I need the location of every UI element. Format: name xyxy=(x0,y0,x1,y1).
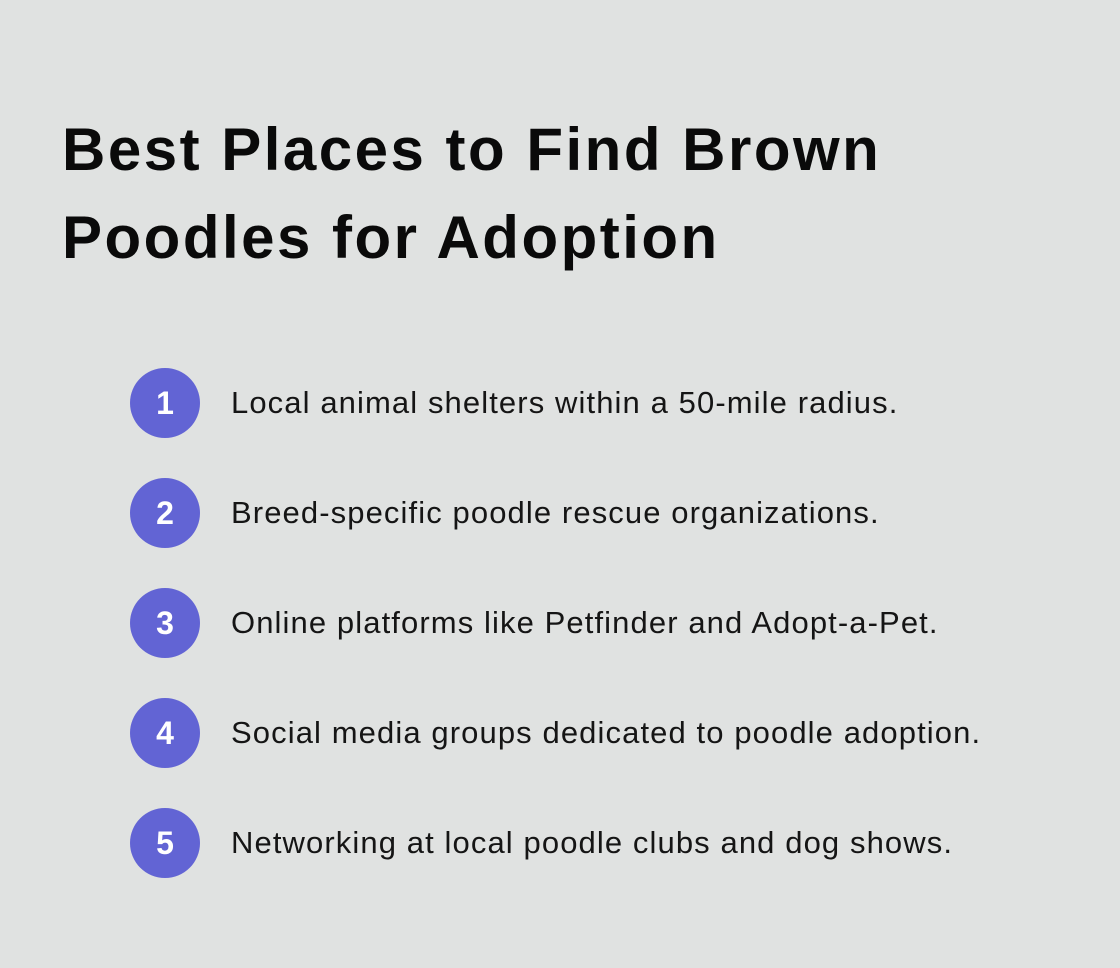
list item 3 xyxy=(130,588,939,658)
text 1: Local animal shelters within a 50-mile radius. xyxy=(231,385,898,420)
list item 2 xyxy=(130,478,880,548)
list item 4 xyxy=(130,698,981,768)
text 4: Social media groups dedicated to poodle adoption. xyxy=(231,715,981,750)
text 2: Breed-specific poodle rescue organizations. xyxy=(231,495,880,530)
title xyxy=(62,116,881,271)
icon: number 1 circle xyxy=(130,368,200,438)
icon: number 2 circle xyxy=(130,478,200,548)
icon: number 5 circle xyxy=(130,808,200,878)
icon: number 3 circle xyxy=(130,588,200,658)
title: Poodles for Adoption xyxy=(62,204,720,271)
list item 1 xyxy=(130,368,898,438)
text 3: Online platforms like Petfinder and Adopt-a-Pet. xyxy=(231,605,939,640)
icon: number 3 circle: 3 xyxy=(156,605,174,641)
icon: number 1 circle: 1 xyxy=(156,385,174,421)
icon: number 4 circle xyxy=(130,698,200,768)
list item 5 xyxy=(130,808,953,878)
text 5: Networking at local poodle clubs and dog shows. xyxy=(231,825,953,860)
icon: number 5 circle: 5 xyxy=(156,825,174,861)
icon: number 2 circle: 2 xyxy=(156,495,174,531)
icon: number 4 circle: 4 xyxy=(156,715,174,751)
title: Best Places to Find Brown xyxy=(62,116,881,183)
